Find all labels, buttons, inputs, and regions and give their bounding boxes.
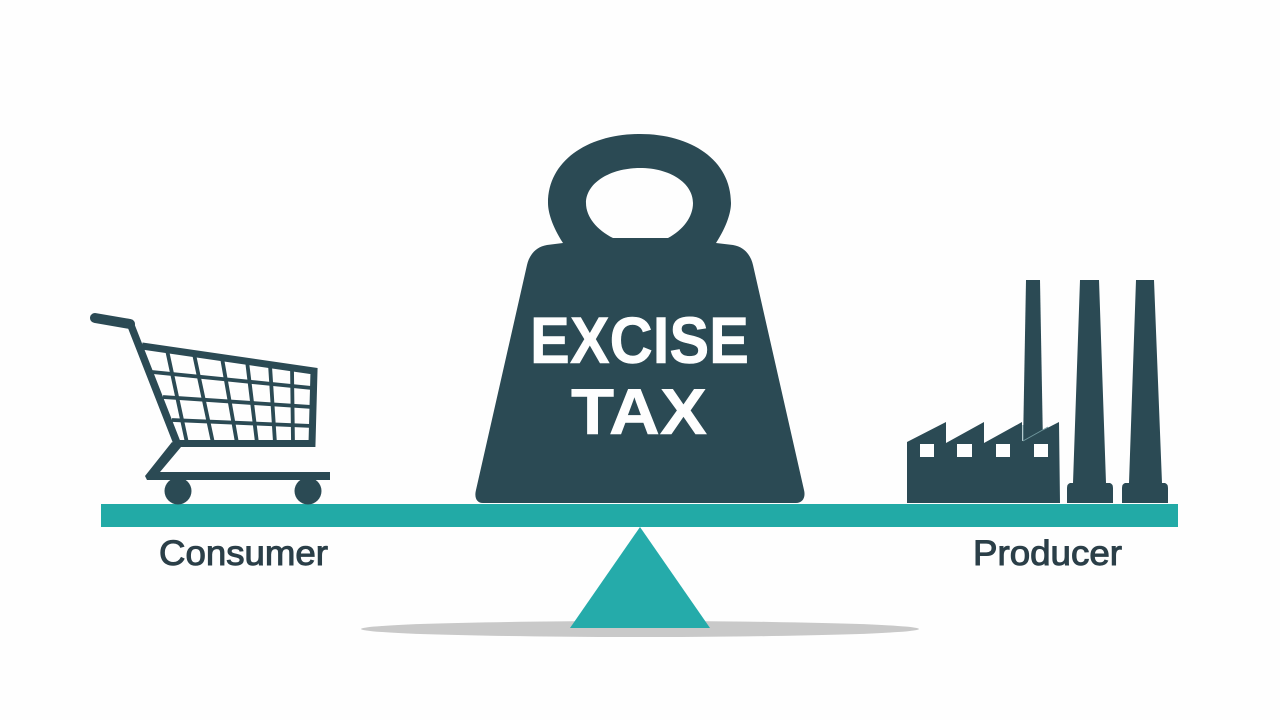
scale beam [101,504,1178,527]
cart wheel left [164,478,192,504]
chimney middle [1067,280,1113,503]
chimney behind factory [1023,280,1043,445]
cart wheel right [294,478,322,504]
cart basket grid [152,350,312,443]
factory windows [920,444,1048,457]
ground shadow [361,621,919,637]
weight label: EXCISE: EXCISE [530,303,749,377]
cart strut and base [145,442,330,480]
cart basket outline [142,346,314,444]
icon: factory with chimneys [907,280,1168,503]
factory building [907,422,1060,503]
label: Producer: Producer [973,534,1122,573]
chimney right [1122,280,1168,503]
label: Consumer: Consumer [159,534,328,573]
scale fulcrum [570,527,710,628]
icon: excise tax weight [475,134,805,503]
factory roof highlight [1023,425,1048,441]
cart frame [130,323,177,443]
weight label: TAX: TAX [571,375,707,448]
icon: shopping cart [95,318,330,504]
cart handle [95,318,130,324]
